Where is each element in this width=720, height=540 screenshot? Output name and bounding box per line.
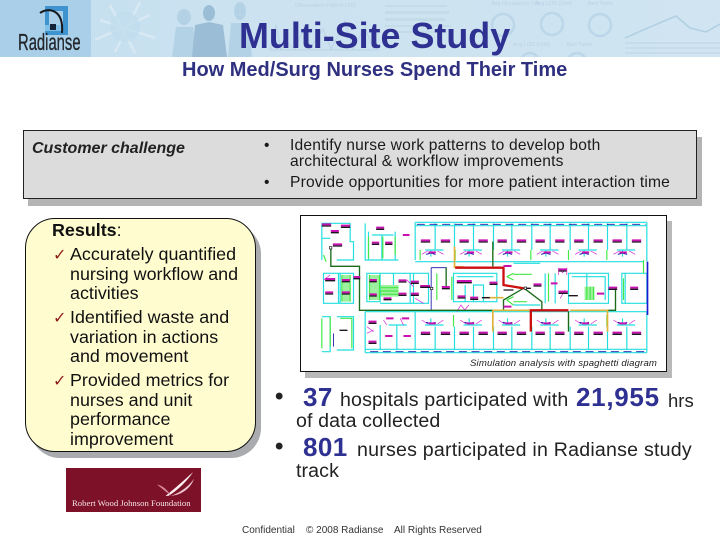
challenge list: • (264, 174, 270, 191)
results text: ✓ (53, 371, 66, 390)
stat: nurses: track (296, 460, 339, 482)
stat: hospitals and hours: 37 (303, 382, 333, 412)
diagram caption: Simulation analysis with spaghetti diagram (470, 358, 657, 369)
results text: ✓ (53, 308, 66, 327)
subtitle: How Med/Surg Nurses Spend Their Time (182, 59, 567, 81)
challenge list: Provide opportunities for more patient interaction time (290, 174, 670, 191)
stat: hospitals and hours: hospitals participated with (340, 389, 568, 411)
stat: hospitals and hours (275, 382, 694, 432)
results text (52, 220, 238, 448)
header banner: Avg LOS (Unit) (535, 1, 572, 7)
results text: improvement (70, 428, 173, 448)
sponsor logo (66, 468, 201, 512)
header banner: Bed Turns (588, 1, 613, 7)
footer: Confidential (242, 525, 295, 536)
stat: hospitals and hours: 21,955 (576, 382, 660, 412)
stat: nurses: • (275, 433, 283, 460)
results text: Accurately quantified (70, 244, 236, 264)
results text: activities (70, 283, 139, 303)
panel: results (25, 218, 256, 452)
stat: nurses (275, 432, 692, 482)
results text: Provided metrics for (70, 370, 229, 390)
results text: ✓ (53, 245, 66, 264)
challenge list (264, 137, 670, 191)
header banner: Avg Occupancy (%) (491, 1, 540, 7)
results text: and movement (70, 346, 188, 366)
header banner: Bed Turns (567, 42, 592, 48)
header banner: Observation Patient LOS (295, 3, 356, 9)
results text: nursing workflow and (70, 264, 238, 284)
stat: hospitals and hours: hrs (668, 390, 694, 411)
panel: spaghetti diagram (300, 215, 667, 372)
footer: All Rights Reserved (394, 525, 482, 536)
floor plan diagram (321, 222, 648, 354)
results text: variation in actions (70, 326, 218, 346)
foundation name: Robert Wood Johnson Foundation (72, 498, 191, 508)
footer: © 2008 Radianse (306, 525, 383, 536)
results text: nurses and unit (70, 390, 192, 410)
logo (0, 0, 91, 57)
header banner: Avg LOS (Unit) (513, 42, 550, 48)
header banner (91, 0, 720, 57)
stat: hospitals and hours: of data collected (296, 410, 440, 432)
stat: nurses: 801 (303, 432, 348, 462)
footer (242, 525, 482, 536)
logo wordmark: Radianse (18, 29, 81, 55)
challenge list: architectural & workflow improvements (290, 153, 564, 170)
heading: customer challenge: Customer challenge (32, 140, 185, 157)
title: Multi-Site Study (239, 16, 510, 56)
stat: nurses: nurses participated in Radianse study (357, 439, 692, 461)
results text: Results: (52, 220, 122, 240)
icon: wing (157, 472, 194, 496)
panel: customer challenge (23, 130, 697, 199)
challenge list: Identify nurse work patterns to develop both (290, 137, 600, 154)
icon: logo mark (40, 6, 68, 35)
results text: Identified waste and (70, 307, 229, 327)
results text: performance (70, 409, 170, 429)
stat: hospitals and hours: • (275, 383, 283, 410)
challenge list: • (264, 137, 270, 154)
